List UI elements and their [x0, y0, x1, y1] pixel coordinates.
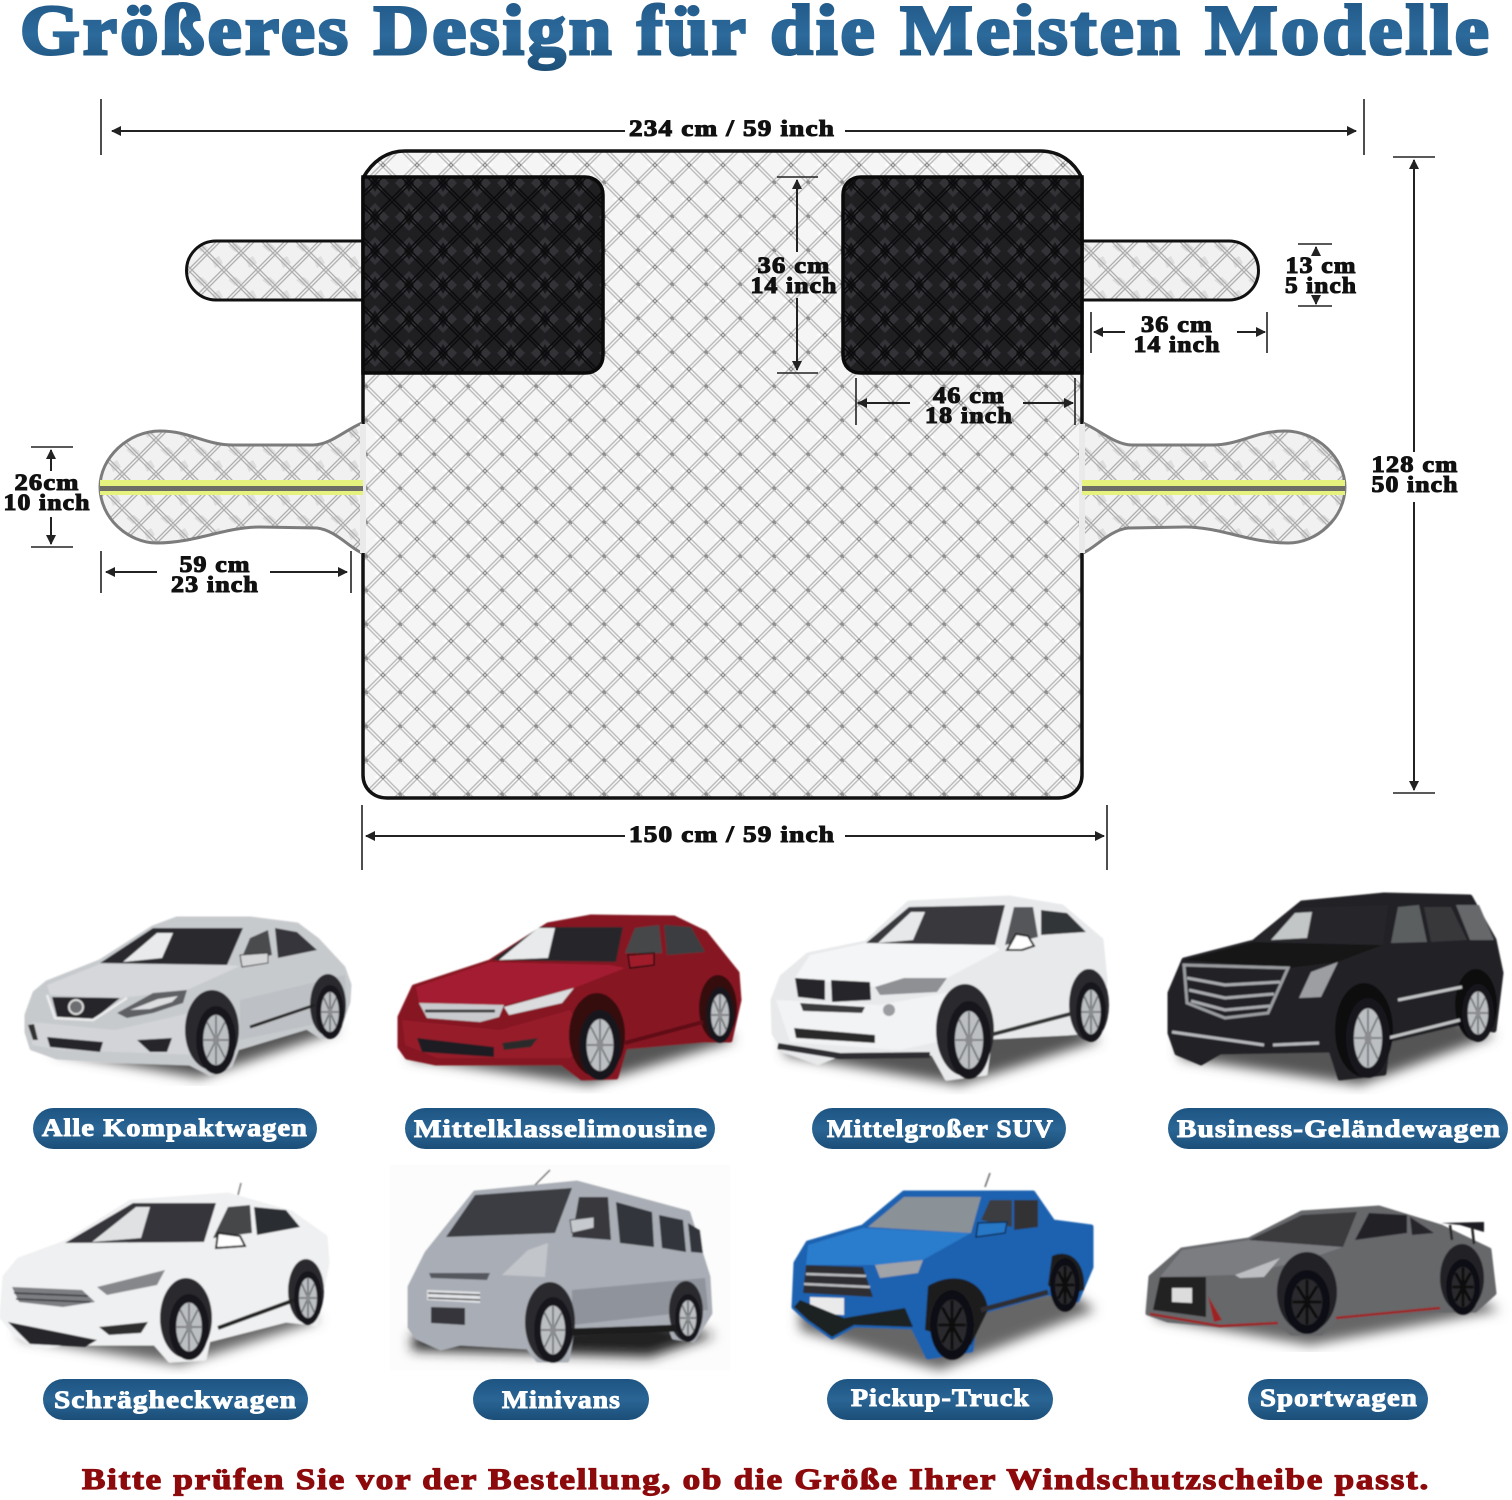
label: Business-Geländewagen: Business-Geländewagen: [1177, 1116, 1501, 1143]
label: Sportwagen: Sportwagen: [1260, 1385, 1418, 1412]
dimension: mirror strap length 59 cm: 59 cm: [180, 552, 250, 577]
dimension: pocket width 46 cm: [856, 378, 1075, 428]
main cover panel: [363, 151, 1082, 798]
car: grey sports car: [1148, 1208, 1500, 1345]
dimension: pocket width 46 cm: 46 cm: [933, 383, 1005, 408]
dimension: mirror strap length 59 cm: 23 inch: [171, 572, 259, 597]
dimension: mirror strap height 26 cm: [4, 447, 91, 547]
dimension: mirror strap height 26 cm: 10 inch: [4, 490, 91, 515]
left mirror strap: [100, 423, 366, 553]
right top strap: [1082, 241, 1258, 300]
car: blue pickup truck: [794, 1173, 1095, 1370]
car: grey minivan: [390, 1165, 730, 1370]
dimension: strap height 13 cm: 5 inch: [1285, 273, 1357, 298]
dimension: height 128 cm: 128 cm: [1372, 452, 1458, 477]
car: silver sedan: [27, 919, 349, 1078]
car: black SUV: [1170, 895, 1501, 1085]
dimension: pocket height 36 cm: 36 cm: [758, 253, 830, 278]
car: white SUV: [773, 898, 1109, 1085]
product diagram: windshield cover: [100, 151, 1345, 798]
dimension: pocket height 36 cm: 14 inch: [750, 273, 838, 298]
dimension: total width 234 cm: 234 cm / 59 inch: [629, 116, 835, 141]
dimension: strap length 36 cm: 36 cm: [1141, 312, 1213, 337]
label: Minivans: [473, 1379, 649, 1420]
label: Minivans: Minivans: [502, 1387, 621, 1414]
label: Sportwagen: [1248, 1379, 1428, 1420]
dimension: strap height 13 cm: 13 cm: [1286, 253, 1356, 278]
car: white hatchback: [2, 1183, 327, 1365]
label: Alle Kompaktwagen: [33, 1108, 317, 1149]
label: Mittelgroßer SUV: Mittelgroßer SUV: [827, 1116, 1054, 1143]
right black pocket: [843, 177, 1082, 373]
label: Alle Kompaktwagen: Alle Kompaktwagen: [42, 1115, 308, 1142]
label: Pickup-Truck: Pickup-Truck: [851, 1385, 1030, 1412]
dimension: height 128 cm: [1372, 157, 1458, 793]
dimension: strap length 36 cm: 14 inch: [1134, 332, 1220, 357]
label: Business-Geländewagen: [1168, 1108, 1508, 1149]
dimension: pocket width 46 cm: 18 inch: [925, 403, 1013, 428]
label: Pickup-Truck: [827, 1379, 1053, 1420]
dimension: total width 234 cm: [101, 99, 1364, 155]
dimension: strap height 13 cm: [1285, 244, 1357, 306]
label: Mittelklasselimousine: [405, 1108, 715, 1149]
dimension: pocket height 36 cm: [750, 177, 838, 373]
label: Mittelklasselimousine: Mittelklasselimousine: [414, 1116, 708, 1143]
left top strap: [186, 241, 363, 300]
label: Mittelgroßer SUV: [812, 1108, 1066, 1149]
dimension: bottom width 150 cm: [362, 805, 1107, 870]
label: Schrägheckwagen: Schrägheckwagen: [54, 1387, 297, 1414]
dimension: mirror strap length 59 cm: [101, 551, 351, 597]
footer warning text: Bitte prüfen Sie vor der Bestellung, ob die Größe Ihrer Windschutzscheibe passt.: [82, 1463, 1430, 1496]
car: red sedan: [400, 917, 739, 1085]
dimension: strap length 36 cm: [1091, 312, 1267, 357]
dimension: mirror strap height 26 cm: 26cm: [14, 470, 80, 495]
left black pocket: [363, 177, 603, 373]
dimension: bottom width 150 cm: 150 cm / 59 inch: [629, 822, 835, 847]
dimension: height 128 cm: 50 inch: [1372, 472, 1458, 497]
label: Schrägheckwagen: [43, 1379, 308, 1420]
right mirror strap: [1079, 423, 1345, 553]
